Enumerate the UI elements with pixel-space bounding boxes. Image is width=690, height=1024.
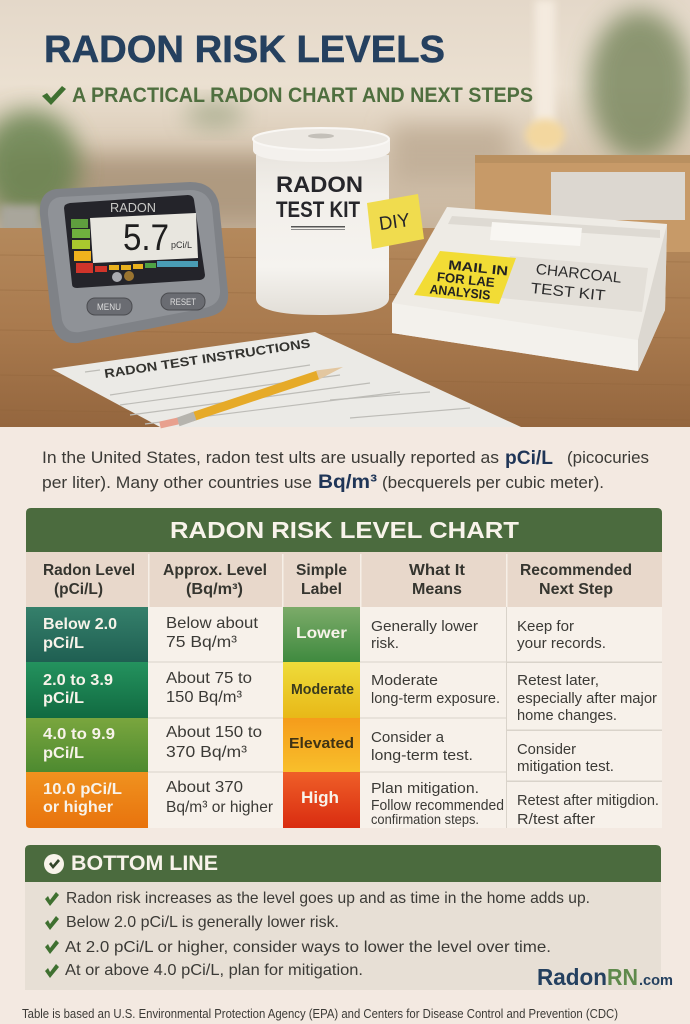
row: below 2.0: Below 2.0 — [43, 616, 117, 633]
intro paragraph: (becquerels per cubic meter). — [382, 473, 604, 492]
row: 4.0 to 9.9: 4.0 to 9.9 — [43, 726, 115, 743]
row: 4.0 to 9.9: Elevated — [289, 735, 354, 752]
charcoal test kit box — [392, 207, 667, 371]
charcoal test kit box: CHARCOAL — [535, 261, 622, 287]
white test kit canister: TEST KIT — [276, 197, 360, 222]
charcoal test kit box: FOR LAE — [436, 269, 496, 290]
bullet 2: Below 2.0 pCi/L is generally lower risk. — [66, 914, 339, 931]
row: 10.0 or higher: or higher — [43, 799, 113, 816]
row: below 2.0: Lower — [296, 625, 347, 642]
intro paragraph: pCi/L — [505, 448, 553, 469]
panel body — [25, 882, 661, 990]
row: 2.0 to 3.9: Retest later, — [517, 672, 599, 689]
source footnote: Table is based an U.S. Environmental Protection Agency (EPA) and Centers for Disease Control and Prevention (CDC) — [22, 1006, 618, 1021]
radon monitor device: RADON — [110, 200, 156, 215]
buttons — [87, 298, 132, 315]
row: 2.0 to 3.9: Moderate — [291, 681, 354, 698]
intro paragraph: Bq/m³ — [318, 472, 377, 493]
background room — [0, 0, 690, 240]
row: 2.0 to 3.9: home changes. — [517, 707, 617, 724]
column headers: (Bq/m³) — [186, 581, 243, 598]
row: 4.0 to 9.9: About 150 to — [166, 724, 262, 741]
row: 2.0 to 3.9: About 75 to — [166, 670, 252, 687]
column headers: Recommended — [520, 562, 632, 579]
panel header — [25, 845, 661, 882]
row: below 2.0: Keep for — [517, 618, 574, 635]
row: 10.0 or higher: R/test after — [517, 811, 595, 828]
row: 2.0 to 3.9: 2.0 to 3.9 — [43, 672, 113, 689]
row: 4.0 to 9.9: pCi/L — [43, 745, 84, 762]
row: 4.0 to 9.9: long-term test. — [371, 747, 473, 764]
white test kit canister: RADON — [276, 172, 363, 197]
row: 2.0 to 3.9: long-term exposure. — [371, 690, 500, 707]
row: below 2.0: Generally lower — [371, 618, 478, 635]
DIY sticky note: DIY — [378, 210, 412, 235]
pencil — [160, 367, 343, 425]
bottom line panel — [25, 845, 661, 990]
row: 4.0 to 9.9: mitigation test. — [517, 758, 614, 775]
row: 10.0 or higher: Plan mitigation. — [371, 780, 479, 797]
row: 4.0 to 9.9 — [26, 718, 614, 775]
row: 2.0 to 3.9: 150 Bq/m³ — [166, 689, 243, 706]
column headers: What It — [409, 562, 465, 579]
risk level chart table — [26, 508, 662, 828]
row: 10.0 or higher — [26, 772, 659, 828]
row: 10.0 or higher: confirmation steps. — [371, 812, 479, 827]
cardboard box — [475, 155, 690, 252]
row: 10.0 or higher: High — [301, 788, 339, 807]
radon monitor device: RESET — [170, 297, 196, 308]
row: 4.0 to 9.9: Consider — [517, 741, 576, 758]
row: 2.0 to 3.9 — [26, 662, 657, 724]
column headers: Label — [301, 581, 342, 598]
column headers: Next Step — [539, 581, 613, 598]
intro paragraph: per liter). Many other countries use — [42, 473, 312, 492]
bullet 3: At 2.0 pCi/L or higher, consider ways to lower the level over time. — [65, 939, 551, 956]
intro paragraph: In the United States, radon test ults are usually reported as — [42, 448, 499, 467]
wooden table — [0, 228, 690, 427]
column headers: Simple — [296, 562, 347, 579]
row: 2.0 to 3.9: pCi/L — [43, 690, 84, 707]
hero photo: radon test kits on a table — [0, 0, 690, 427]
screen — [64, 195, 205, 288]
row: below 2.0: your records. — [517, 635, 606, 652]
instructions sheet: RADON TEST INSTRUCTIONS — [103, 336, 311, 381]
main title: RADON RISK LEVELS — [44, 29, 445, 71]
column headers: (pCi/L) — [54, 581, 103, 598]
RadonRN.com logo: RN — [607, 964, 638, 990]
row: below 2.0: risk. — [371, 635, 399, 652]
RadonRN.com logo: .com — [639, 972, 673, 989]
row: 10.0 or higher: About 370 — [166, 779, 243, 796]
row: 10.0 or higher: 10.0 pCi/L — [43, 781, 122, 798]
row: 10.0 or higher: Retest after mitigdion. — [517, 792, 659, 809]
intro paragraph — [42, 448, 649, 493]
row: 2.0 to 3.9: especially after major — [517, 690, 657, 707]
table title bar — [26, 508, 662, 552]
radon monitor device: pCi/L — [171, 240, 192, 251]
mail-in label — [414, 251, 516, 304]
row: 4.0 to 9.9: 370 Bq/m³ — [166, 744, 248, 761]
table title bar: RADON RISK LEVEL CHART — [170, 517, 519, 543]
subtitle: A PRACTICAL RADON CHART AND NEXT STEPS — [72, 84, 533, 107]
radon monitor device — [40, 182, 228, 343]
RadonRN.com logo: Radon — [537, 964, 607, 990]
charcoal test kit box: MAIL IN — [448, 257, 509, 278]
row: 2.0 to 3.9: Moderate — [371, 672, 438, 689]
DIY sticky note — [367, 194, 424, 249]
radon monitor device: MENU — [97, 302, 121, 313]
row: below 2.0 — [26, 607, 606, 662]
column headers — [26, 552, 662, 607]
radon monitor device: 5.7 — [123, 217, 169, 258]
row: below 2.0: 75 Bq/m³ — [166, 634, 238, 651]
column headers: Radon Level — [43, 562, 135, 579]
panel header: BOTTOM LINE — [71, 852, 218, 875]
RadonRN.com logo — [537, 964, 673, 990]
charcoal test kit box: TEST KIT — [530, 280, 606, 305]
row: below 2.0: pCi/L — [43, 635, 84, 652]
instructions sheet — [52, 332, 521, 427]
intro paragraph: (picocuries — [567, 448, 649, 467]
row: 4.0 to 9.9: Consider a — [371, 729, 445, 746]
table body background — [148, 607, 662, 828]
charcoal test kit box: ANALYSIS — [429, 281, 491, 303]
row: 10.0 or higher: Follow recommended — [371, 798, 504, 814]
column headers: Approx. Level — [163, 562, 267, 579]
row: 10.0 or higher: Bq/m³ or higher — [166, 799, 274, 816]
column headers: Means — [412, 581, 462, 598]
white test kit canister — [253, 128, 390, 315]
bullet 1: Radon risk increases as the level goes up and as time in the home adds up. — [66, 890, 590, 907]
bullet 4: At or above 4.0 pCi/L, plan for mitigation. — [65, 962, 363, 979]
row: below 2.0: Below about — [166, 615, 259, 632]
